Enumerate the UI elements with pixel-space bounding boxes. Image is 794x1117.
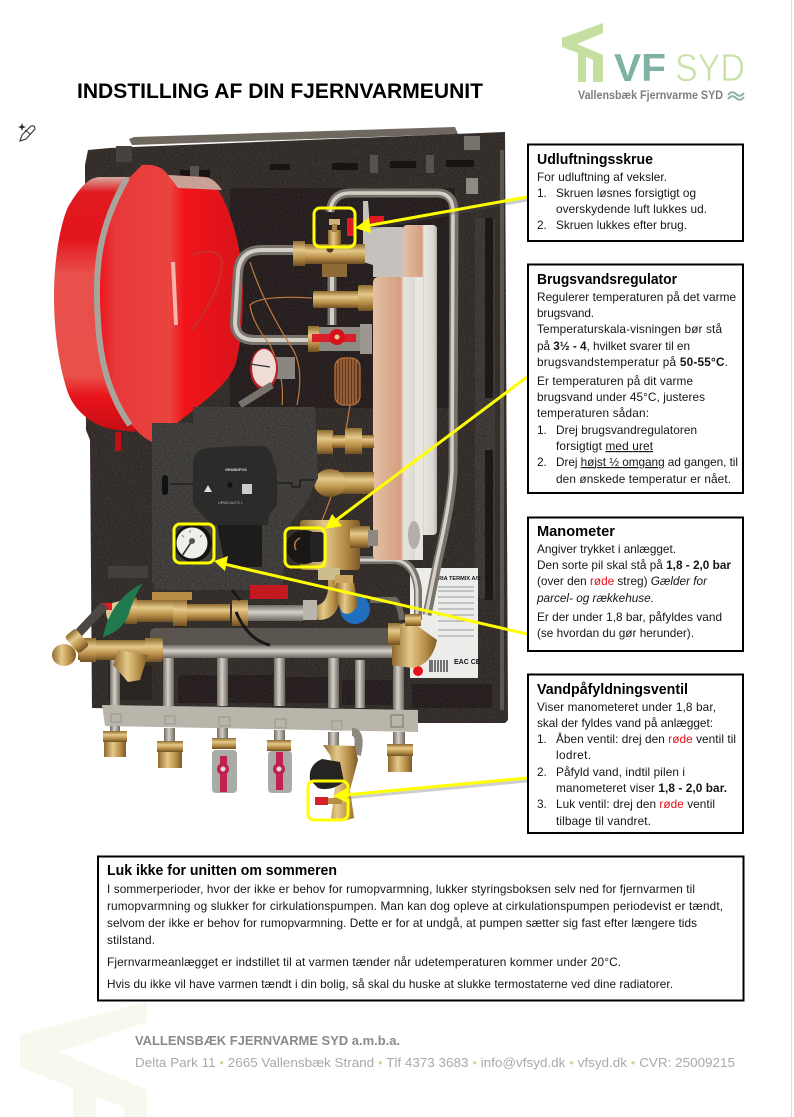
top metal strip — [129, 127, 458, 145]
foam cut lines — [170, 480, 314, 487]
panel: Vandpåfyldningsventil: Vandpåfyldningsventil — [537, 682, 688, 698]
panel: Udluftningsskrue: Skruen lukkes efter brug. — [556, 218, 687, 232]
circulation pump: GRUNDFOS — [225, 468, 247, 472]
panel: Vandpåfyldningsventil: 1. — [537, 732, 547, 746]
logo: VF SYD — [562, 23, 745, 102]
footer — [135, 1034, 735, 1070]
circulation pump — [193, 446, 277, 567]
footer: Delta Park 11 • 2665 Vallensbæk Strand • Tlf 4373 3683 • info@vfsyd.dk • vfsyd.dk • CVR: 25009215 — [135, 1055, 735, 1070]
green tape and red tag — [100, 583, 143, 637]
product label — [410, 568, 481, 678]
brass fittings — [314, 428, 374, 497]
panel: Manometer — [528, 518, 743, 651]
circulation pump: UPM3 AUTO L — [218, 501, 243, 505]
panel: Luk ikke for unitten om sommeren — [98, 856, 744, 1000]
panel: Brugsvandsregulator: på 3½ - 4, hvilket svarer til en — [537, 339, 690, 353]
callout marker: air screw highlight — [314, 208, 355, 247]
panel: Vandpåfyldningsventil: Påfyld vand, indtil pilen i — [556, 765, 685, 779]
panel: Manometer: Er der under 1,8 bar, påfyldes vand — [537, 610, 722, 624]
panel: Luk ikke for unitten om sommeren: Fjernvarmeanlægget er indstillet til at varmen tænder når udetemperaturen kommer under 20°C. — [107, 955, 621, 969]
logo: VF SYD: VF — [614, 47, 666, 90]
panel: Brugsvandsregulator: brugsvandstemperatur på 50-55°C. — [537, 355, 728, 369]
valve: brass cylinder — [313, 285, 373, 311]
product label: EAC CE — [454, 659, 481, 666]
panel: Vandpåfyldningsventil: Luk ventil: drej den røde ventil — [556, 797, 715, 811]
product label: RIA TERMIX A/S — [438, 576, 481, 582]
background watermark: pale logo — [20, 1002, 147, 1117]
footer: VALLENSBÆK FJERNVARME SYD a.m.b.a. — [135, 1034, 400, 1048]
panel: Luk ikke for unitten om sommeren: stilstand. — [107, 933, 155, 947]
panel: Luk ikke for unitten om sommeren: Hvis du ikke vil have varmen tændt i din bolig, så skal du huske at slukke termostaterne ved dine radiatorer. — [107, 977, 673, 991]
panel: Vandpåfyldningsventil: Viser manometeret under 1,8 bar, — [537, 700, 716, 714]
callout marker: regulator highlight — [285, 528, 325, 567]
foam box — [152, 407, 318, 590]
panel: Brugsvandsregulator: Er temperaturen på dit varme — [537, 374, 693, 388]
panel: Brugsvandsregulator: Temperaturskala-visningen bør stå — [537, 322, 722, 336]
valve: red ball valve — [308, 324, 372, 354]
distribution pipes — [110, 628, 404, 710]
panel: Brugsvandsregulator: brugsvand under 45°C, justeres — [537, 390, 705, 404]
logo: VF SYD: Vallensbæk Fjernvarme SYD — [578, 88, 723, 102]
logo: VF SYD: SYD — [675, 47, 745, 90]
panel: Vandpåfyldningsventil: lodret. — [556, 748, 591, 762]
ball valves — [212, 750, 292, 793]
connection fittings — [103, 726, 413, 772]
panel: Vandpåfyldningsventil: manometeret viser 1,8 - 2,0 bar. — [556, 781, 727, 795]
panel: Manometer: Angiver trykket i anlægget. — [537, 542, 676, 556]
copper coil — [335, 358, 360, 405]
panel: Brugsvandsregulator: Drej brugsvandregulatoren — [556, 423, 697, 437]
big stainless pipe — [330, 193, 454, 620]
panel: Vandpåfyldningsventil: 2. — [537, 765, 547, 779]
panel: Vandpåfyldningsventil: skal der fyldes vand på anlægget: — [537, 716, 713, 730]
manometer gauge — [174, 524, 212, 562]
filling valve — [310, 732, 359, 822]
panel: Brugsvandsregulator: Regulerer temperaturen på det varme — [537, 290, 736, 304]
upper brass run — [106, 585, 303, 645]
panel: Luk ikke for unitten om sommeren: Luk ikke for unitten om sommeren — [107, 863, 337, 879]
panel: Udluftningsskrue — [528, 144, 743, 241]
slot in foam — [162, 475, 168, 495]
arrow: regulator — [325, 377, 527, 529]
panel: Brugsvandsregulator: temperaturen sådan: — [537, 406, 649, 420]
expansion tank — [54, 165, 243, 451]
panel: Udluftningsskrue: 2. — [537, 218, 547, 232]
right brass elbow — [388, 614, 437, 668]
panel: Vandpåfyldningsventil: Åben ventil: drej den røde ventil til — [556, 732, 736, 746]
arrow: manometer — [214, 556, 527, 634]
panel: Udluftningsskrue: Udluftningsskrue — [537, 152, 653, 168]
panel: Luk ikke for unitten om sommeren: selvom der ikke er behov for rumopvarmning. Dette er for at undgå, at pumpen sætter sig fast efter længere tids — [107, 916, 697, 930]
callout marker: manometer highlight — [174, 524, 214, 563]
panel: Luk ikke for unitten om sommeren: rumopvarmning og slukker for cirkulationspumpen. Man kan dog opleve at cirkulationspumpen periodevist er tændt, — [107, 899, 723, 913]
strainer and cap — [52, 605, 163, 682]
panel: Manometer: (se hvordan du gør herunder). — [537, 626, 694, 640]
panel: Udluftningsskrue: For udluftning af veksler. — [537, 170, 667, 184]
black insulation board — [85, 132, 508, 723]
copper capillaries — [250, 262, 350, 525]
valve: air screw — [293, 216, 384, 277]
loop pipe — [235, 250, 332, 340]
panel: Brugsvandsregulator: brugsvand. — [537, 306, 594, 320]
title: INDSTILLING AF DIN FJERNVARMEUNIT — [77, 79, 483, 103]
panel: Manometer: (over den røde streg) Gælder for — [537, 574, 708, 588]
panel: Vandpåfyldningsventil — [528, 674, 743, 833]
panel: Luk ikke for unitten om sommeren: I sommerperioder, hvor der ikke er behov for rumopvarmning, lukker styringsboksen selv ned for fjernvarmen til — [107, 882, 695, 896]
callout marker: filling valve highlight — [308, 781, 348, 820]
panel: Udluftningsskrue: Skruen løsnes forsigtigt og — [556, 186, 696, 200]
panel: Brugsvandsregulator: Brugsvandsregulator — [537, 272, 677, 288]
arrow: filling valve — [333, 778, 527, 803]
arrow: air screw — [355, 197, 527, 233]
panel: Brugsvandsregulator: forsigtigt med uret — [556, 439, 654, 453]
panel: Vandpåfyldningsventil: tilbage til vandret. — [556, 814, 651, 828]
panel: Udluftningsskrue: 1. — [537, 186, 547, 200]
mounting rail — [102, 705, 418, 732]
panel: Brugsvandsregulator — [528, 264, 743, 493]
panel: Vandpåfyldningsventil: 3. — [537, 797, 547, 811]
panel: Brugsvandsregulator: Drej højst ½ omgang ad gangen, til — [556, 455, 738, 469]
board recess and slots — [108, 136, 504, 710]
panel: Brugsvandsregulator: 1. — [537, 423, 547, 437]
photo: fjernvarmeunit — [52, 127, 508, 822]
silver mounting plate — [363, 201, 403, 277]
panel: Brugsvandsregulator: den ønskede temperatur er nået. — [556, 472, 731, 486]
panel: Manometer: Den sorte pil skal stå på 1,8 - 2,0 bar — [537, 558, 731, 572]
brass elbows and blue ring — [303, 568, 402, 624]
heat exchanger — [373, 225, 437, 560]
panel: Udluftningsskrue: overskydende luft lukkes ud. — [556, 202, 707, 216]
thermometer — [240, 348, 295, 405]
panel: Manometer: Manometer — [537, 524, 615, 540]
icon: sparkle pen — [18, 123, 35, 141]
panel: Brugsvandsregulator: 2. — [537, 455, 547, 469]
panel: Manometer: parcel- og rækkehuse. — [536, 591, 654, 605]
brass block with regulator — [286, 520, 378, 570]
